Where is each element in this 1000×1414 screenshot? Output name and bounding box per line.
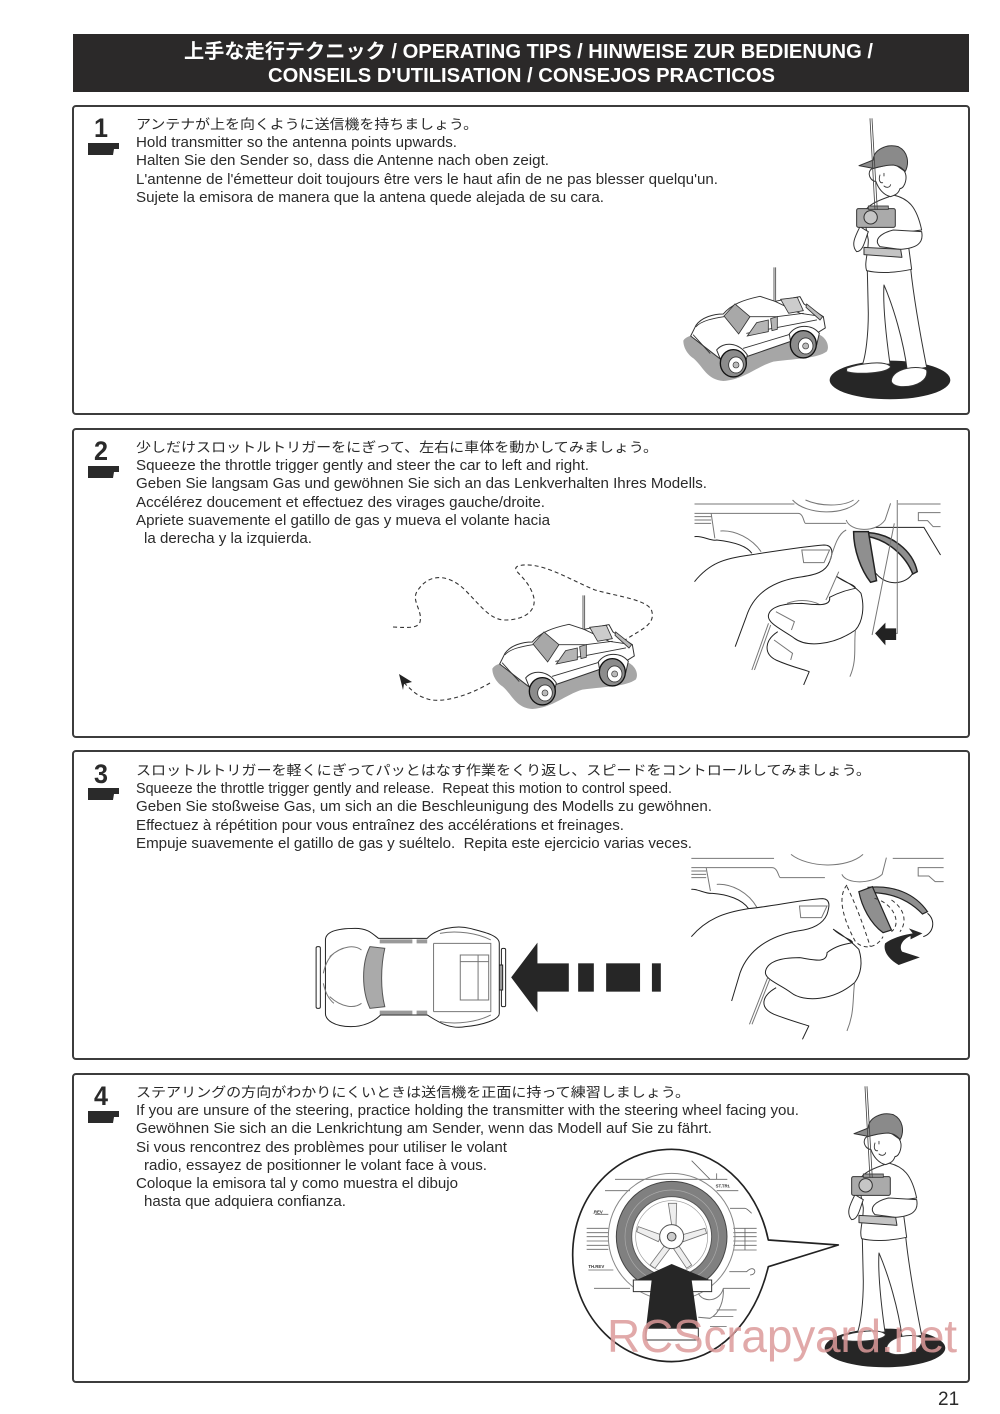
instructions step 4: radio, essayez de positionner le volant face à vous. [144, 1158, 487, 1174]
labels on transmitter face: ST.TRt. [716, 1184, 730, 1189]
step number 2 [88, 436, 119, 478]
instructions step 3 [136, 763, 871, 852]
instructions step 1: Sujete la emisora de manera que la antena quede alejada de su cara. [136, 190, 604, 206]
instructions step 4: If you are unsure of the steering, practice holding the transmitter with the steering wheel facing you. [136, 1103, 799, 1119]
instructions step 4: Coloque la emisora tal y como muestra el dibujo [136, 1176, 458, 1192]
instructions step 1: Halten Sie den Sender so, dass die Antenne nach oben zeigt. [136, 153, 549, 169]
instructions step 3: Effectuez à répétition pour vous entraînez des accélérations et freinages. [136, 818, 624, 834]
title banner: CONSEILS D'UTILISATION / CONSEJOS PRACTICOS [268, 65, 775, 87]
illustration: hand pulsing trigger [691, 854, 944, 1039]
instructions step 2: Geben Sie langsam Gas und gewöhnen Sie sich an das Lenkverhalten Ihres Modells. [136, 476, 707, 492]
illustration: truck from above [316, 927, 506, 1027]
instructions step 2: 少しだけスロットルトリガーをにぎって、左右に車体を動かしてみましょう。 [136, 440, 658, 455]
panel: step 2 [73, 429, 969, 737]
dashed driving path [393, 565, 652, 700]
instructions step 3: Geben Sie stoßweise Gas, um sich an die Beschleunigung des Modells zu gewöhnen. [136, 799, 712, 815]
instructions step 1: Hold transmitter so the antenna points upwards. [136, 135, 457, 151]
arrow: release motion [885, 928, 922, 965]
step number 3: 3 [94, 759, 108, 789]
instructions step 2 [136, 440, 707, 547]
instructions step 4: Si vous rencontrez des problèmes pour utiliser le volant [136, 1140, 507, 1156]
step number 4 [88, 1081, 119, 1123]
panel: step 1 [73, 106, 969, 414]
labels on transmitter face [588, 1184, 730, 1269]
instructions step 1: アンテナが上を向くように送信機を持ちましょう。 [136, 117, 478, 132]
instructions step 2: Accélérez doucement et effectuez des virages gauche/droite. [136, 495, 545, 511]
instructions step 3: Squeeze the throttle trigger gently and release. Repeat this motion to control speed. [136, 781, 672, 797]
watermark: RCScrapyard.net [607, 1310, 957, 1362]
illustration: RC truck [492, 595, 637, 709]
step number 3 [88, 759, 119, 800]
page number: 21 [938, 1389, 959, 1410]
labels on transmitter face: .REV [593, 1209, 603, 1214]
instructions step 1: L'antenne de l'émetteur doit toujours être vers le haut afin de ne pas blesser quelqu'un. [136, 172, 718, 188]
instructions step 2: la derecha y la izquierda. [144, 531, 312, 547]
title banner [73, 34, 969, 92]
illustration: hand squeezing trigger [694, 500, 941, 685]
step number 2: 2 [94, 436, 108, 466]
instructions step 3: スロットルトリガーを軽くにぎってパッとはなす作業をくり返し、スピードをコントロールしてみましょう。 [136, 763, 871, 778]
instructions step 3: Empuje suavemente el gatillo de gas y suéltelo. Repita este ejercicio varias veces. [136, 836, 692, 852]
instructions step 2: Apriete suavemente el gatillo de gas y mueva el volante hacia [136, 513, 550, 529]
callout: steering wheel close-up [573, 1149, 838, 1362]
illustration: RC truck [683, 267, 828, 381]
step number 1: 1 [94, 113, 108, 143]
panel: step 3 [73, 751, 969, 1059]
instructions step 4: Gewöhnen Sie sich an die Lenkrichtung am Sender, wenn das Modell auf Sie zu fährt. [136, 1121, 712, 1137]
illustration: person holding transmitter [830, 118, 950, 399]
instructions step 4: ステアリングの方向がわかりにくいときは送信機を正面に持って練習しましょう。 [136, 1085, 690, 1100]
step number 1 [88, 113, 119, 155]
instructions step 2: Squeeze the throttle trigger gently and steer the car to left and right. [136, 458, 589, 474]
illustration: person holding transmitter facing front [825, 1086, 945, 1367]
instructions step 4 [136, 1085, 799, 1210]
title banner: 上手な走行テクニック / OPERATING TIPS / HINWEISE ZUR BEDIENUNG / [184, 40, 873, 63]
instructions step 4: hasta que adquiera confianza. [144, 1194, 346, 1210]
panel: step 4 [73, 1074, 969, 1382]
labels on transmitter face: TH.REV [588, 1264, 604, 1269]
step number 4: 4 [94, 1081, 108, 1111]
instructions step 1 [136, 117, 718, 206]
arrow: forward direction [511, 943, 661, 1012]
